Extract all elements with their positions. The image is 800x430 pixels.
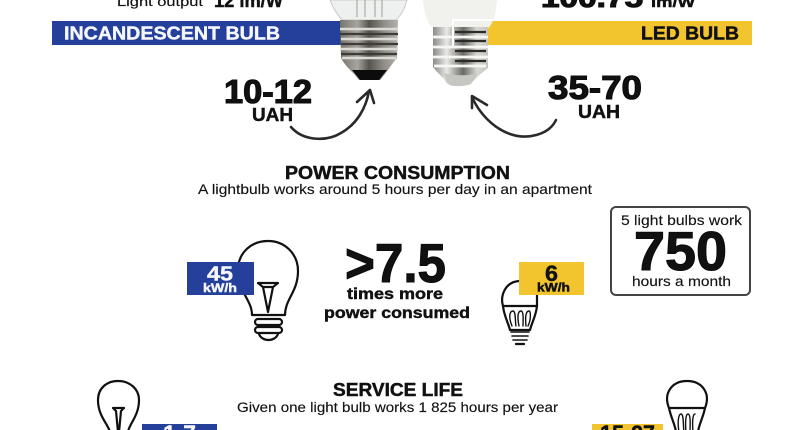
arrow: price to LED bulb — [472, 96, 556, 136]
callout: 750 hours a month: 750 — [634, 220, 727, 282]
heading: service life: Given one light bulb works 1 825 hours per year — [237, 400, 559, 415]
label: 6 kW/h: kW/h — [537, 282, 570, 294]
photo: LED bulb — [423, 0, 497, 86]
banner: incandescent bulb: INCANDESCENT BULB — [64, 24, 280, 44]
price: incandescent: UAH — [252, 105, 293, 125]
banner: LED bulb: LED BULB — [641, 24, 739, 44]
callout: 750 hours a month: 5 light bulbs work — [621, 212, 743, 228]
label: 45 kW/h: kW/h — [203, 283, 237, 295]
label: service life incandescent — [142, 421, 217, 430]
heading: power consumption: A lightbulb works around 5 hours per day in an apartment — [198, 181, 592, 197]
price: LED: 35-70 — [548, 69, 642, 106]
banner: LED bulb — [486, 21, 752, 45]
callout: 750 hours a month — [611, 207, 750, 295]
arrow: price to incandescent bulb — [291, 90, 374, 139]
label: 45 kW/h — [187, 262, 254, 295]
banner: incandescent bulb — [52, 21, 344, 45]
heading: service life: SERVICE LIFE — [333, 380, 463, 400]
comparison: more than 7.5 times: power consumed — [324, 305, 470, 322]
price: incandescent: 10-12 — [224, 73, 312, 110]
icon: incandescent bulb, service life — [98, 381, 139, 430]
price: LED: UAH — [578, 102, 620, 122]
light output: LED — [541, 0, 696, 13]
light output: incandescent — [117, 0, 283, 11]
icon: incandescent bulb outline — [238, 241, 298, 340]
comparison: more than 7.5 times: >7.5 — [345, 232, 446, 294]
callout: 750 hours a month: hours a month — [632, 273, 731, 289]
heading: power consumption — [198, 162, 592, 197]
label: 6 kW/h: 6 — [545, 261, 558, 286]
price: incandescent — [224, 73, 312, 125]
label: 6 kW/h — [519, 261, 584, 295]
photo: incandescent bulb — [330, 0, 407, 80]
comparison: more than 7.5 times — [324, 232, 470, 322]
icon: LED bulb, service life — [667, 381, 707, 430]
price: LED — [548, 69, 642, 122]
label: 45 kW/h: 45 — [207, 262, 233, 286]
comparison: more than 7.5 times: times more — [347, 286, 443, 303]
heading: power consumption: POWER CONSUMPTION — [285, 162, 510, 183]
icon: LED bulb outline — [502, 281, 537, 344]
heading: service life — [237, 380, 559, 415]
